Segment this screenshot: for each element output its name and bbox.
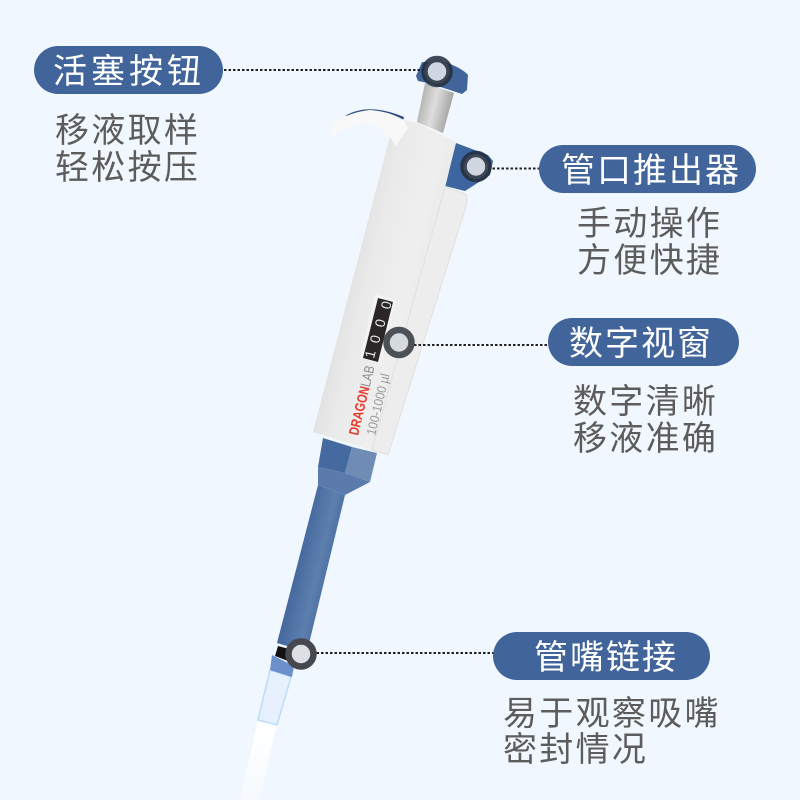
nozzle connector: [275, 646, 300, 664]
marker: digital window: [386, 330, 412, 355]
label: digital window: [548, 318, 739, 366]
lower blue shaft: [277, 438, 377, 652]
label: digital window: 数字视窗: [569, 325, 713, 363]
text: window description: 数字清晰: [573, 383, 718, 421]
brand label: DRAGONLAB: [345, 364, 377, 437]
brand label: [345, 364, 393, 437]
ejector sleeve: [372, 187, 467, 455]
digital window: 0: [377, 299, 395, 311]
text: ejector description: 手动操作: [577, 205, 722, 243]
label: plunger button: [34, 46, 223, 94]
text: nozzle description: 密封情况: [503, 731, 648, 769]
text: window description: 移液准确: [573, 420, 718, 458]
finger hook: [330, 110, 408, 146]
label: tip ejector: 管口推出器: [561, 152, 741, 190]
main body: [313, 120, 456, 455]
marker: tip ejector: [464, 154, 488, 179]
digital window: 1: [361, 348, 379, 360]
label: nozzle connection: 管嘴链接: [534, 639, 678, 677]
digital window: 0: [371, 317, 389, 329]
label: plunger button: 活塞按钮: [53, 53, 205, 91]
leader lines: [224, 70, 548, 653]
pipette tip: [240, 655, 294, 800]
label: tip ejector: [539, 145, 756, 193]
label: nozzle connection: [493, 632, 710, 680]
text: window description: [573, 383, 718, 458]
window surround: [360, 294, 396, 364]
hook top rim: [345, 109, 404, 121]
text: plunger description: 移液取样: [55, 112, 200, 150]
text: ejector description: 方便快捷: [577, 242, 722, 280]
text: plunger description: 轻松按压: [55, 149, 200, 187]
text: nozzle description: 易于观察吸嘴: [503, 695, 721, 733]
brand label: 100-1000 µl: [363, 372, 393, 437]
text: nozzle description: [503, 695, 721, 769]
plunger button: [416, 62, 468, 94]
plunger stem: [417, 83, 454, 133]
marker: plunger button: [424, 59, 450, 84]
marker: nozzle connection: [288, 642, 314, 666]
tip ejector button: [445, 143, 493, 191]
digital window: [361, 298, 395, 362]
text: ejector description: [577, 205, 722, 280]
text: plunger description: [55, 112, 200, 187]
digital window: 0: [366, 333, 384, 345]
